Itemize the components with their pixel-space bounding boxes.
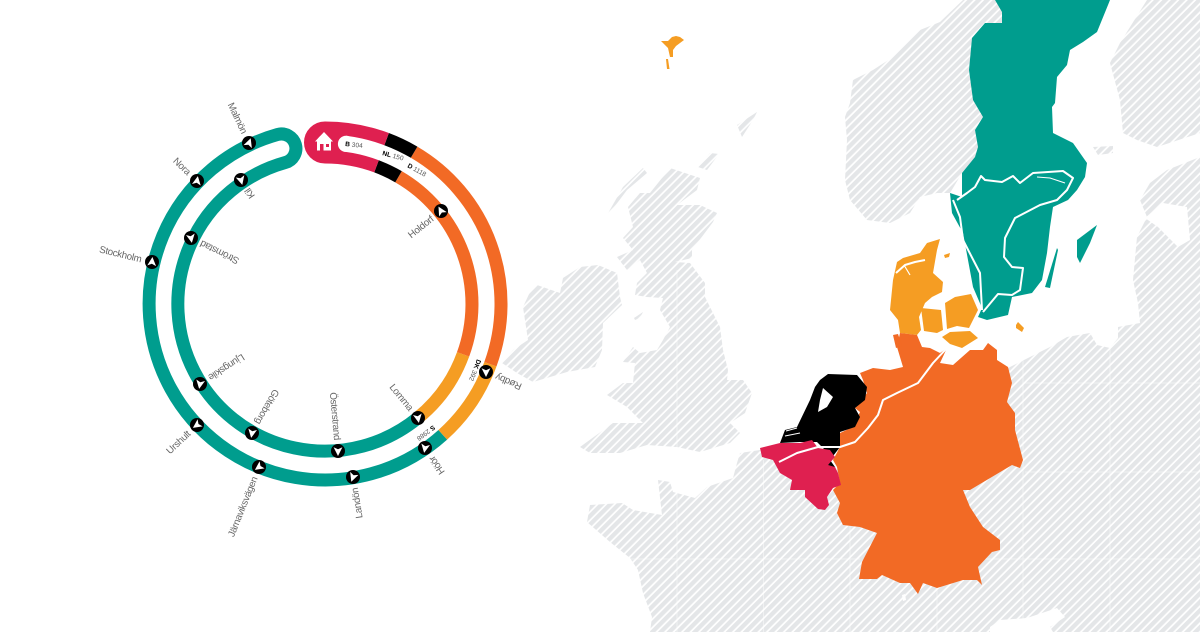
seas cut out of neighbouring land: [902, 203, 1190, 632]
distance: S 2988: S 2988: [415, 423, 436, 442]
stop: Göteborg: [245, 387, 281, 440]
ring: Netherlands black outer: [387, 139, 414, 152]
stop: Ljungskile: Ljungskile: [205, 351, 246, 383]
icon: home: [315, 132, 333, 150]
ring: Denmark amber outer: [443, 364, 490, 435]
stop: Kil: [234, 173, 258, 200]
stop: Holdorf: Holdorf: [406, 214, 437, 241]
ring: Denmark amber inner: [418, 354, 463, 418]
stop: Landön: Landön: [350, 487, 366, 519]
country: Faroe Islands: [661, 36, 684, 69]
ring: Germany orange inner: [398, 177, 472, 354]
ring: Netherlands black inner: [376, 166, 398, 177]
map: northern Europe: [502, 0, 1200, 632]
stop: Nora: Nora: [170, 156, 193, 178]
stop: Urshult: Urshult: [165, 429, 194, 457]
stop: Höör: Höör: [427, 453, 448, 476]
country: Netherlands: [780, 374, 867, 467]
ring: Sweden teal: [149, 134, 443, 480]
stop: Strömstad: [184, 231, 241, 266]
country: Denmark: [890, 239, 1024, 348]
stop: Holdorf: [406, 204, 448, 241]
stop: Höör: [418, 441, 448, 476]
distance: NL 150: NL 150: [381, 150, 405, 163]
country: Belgium: [760, 440, 841, 510]
stop: Malmön: Malmön: [225, 101, 249, 136]
stop: Landön: [346, 470, 366, 519]
stop: Stockholm: Stockholm: [98, 244, 143, 265]
stop: Österstrand: [327, 392, 345, 458]
distance: DK 392: DK 392: [467, 358, 482, 382]
country: Sweden: [950, 0, 1110, 320]
stop: Österstrand: Österstrand: [327, 392, 342, 441]
stop: Lomma: Lomma: [387, 382, 415, 414]
stop: Järnaviksvägen: [226, 460, 266, 539]
stop: Rødby: Rødby: [494, 371, 524, 392]
stop: Lomma: [387, 382, 425, 425]
stop: Järnaviksvägen: Järnaviksvägen: [226, 475, 260, 539]
graticule lines: [630, 270, 1200, 632]
journey ring diagram: [98, 101, 524, 539]
stop: Malmön: [225, 101, 256, 150]
stop: Urshult: [165, 418, 204, 457]
ring: Germany orange outer: [414, 152, 501, 364]
ring: Belgium red start cap: [310, 128, 387, 166]
stop: Rødby: [479, 365, 524, 392]
stop: Stockholm: [98, 244, 159, 269]
stop: Kil: Kil: [243, 186, 258, 200]
neighbouring land: hatched grey: [502, 0, 1200, 632]
stop: Ljungskile: [193, 351, 246, 391]
distance: D 1118: D 1118: [406, 163, 427, 179]
stop: Strömstad: Strömstad: [199, 237, 241, 266]
distance: B 304: B 304: [345, 141, 363, 150]
stop: Nora: [170, 156, 204, 188]
stop: Göteborg: Göteborg: [252, 387, 281, 426]
country: Germany: [833, 333, 1023, 594]
route across Belgium, the Netherlands and Germany: [779, 348, 947, 462]
